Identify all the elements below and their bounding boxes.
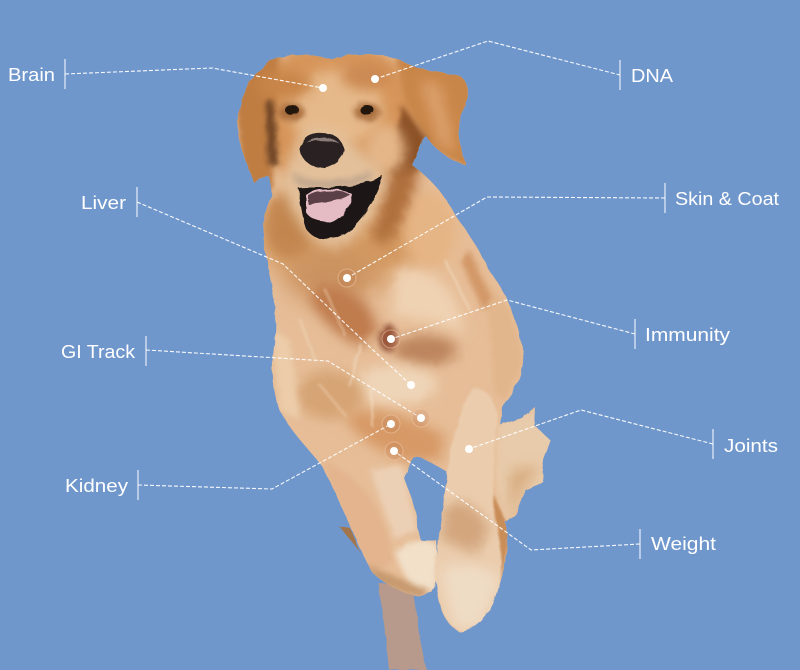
rear thigh edge [494, 495, 510, 590]
far paw tip [339, 526, 360, 552]
label: DNA: DNA [631, 66, 673, 86]
tail feathers [494, 409, 550, 521]
belly [345, 410, 445, 462]
label: Immunity: Immunity [645, 325, 730, 345]
marker dots [319, 75, 473, 455]
left foreleg [324, 467, 390, 570]
marker rings [338, 269, 430, 460]
label: Skin & Coat: Skin & Coat [675, 189, 779, 209]
connector lines [65, 41, 713, 550]
foreleg [436, 388, 502, 631]
base coat [230, 45, 560, 645]
tongue [306, 189, 352, 222]
chest lower light [353, 365, 437, 405]
left leg inner [370, 465, 417, 540]
rear side [488, 295, 524, 396]
left ear [237, 57, 284, 192]
left flank light [272, 330, 300, 420]
cheek right [365, 124, 405, 176]
nose [300, 133, 344, 168]
lip shade [292, 170, 372, 189]
rear shade [460, 250, 492, 310]
nose highlight [306, 137, 340, 144]
eye shadow right [354, 103, 380, 121]
chest dark fur [310, 285, 378, 345]
dog body [230, 40, 560, 645]
eye left [285, 105, 299, 115]
fore chest [296, 371, 364, 419]
paw shade [369, 566, 430, 596]
rear leg [378, 583, 426, 670]
ruff right [404, 192, 456, 268]
neck dark left [266, 191, 314, 259]
forehead light [287, 70, 383, 146]
chest hollow [379, 324, 397, 352]
neck orange [263, 192, 422, 293]
paw light [440, 565, 500, 628]
label: Brain: Brain [8, 65, 55, 85]
foreleg shade [440, 502, 490, 555]
shoulder shade [393, 335, 457, 365]
tail shade [508, 465, 540, 520]
label: Weight: Weight [651, 534, 716, 554]
label ticks [65, 59, 713, 559]
right ear [394, 58, 468, 166]
left paw [395, 540, 438, 596]
eye right [360, 105, 374, 115]
left ear shade [266, 100, 278, 165]
fur streaks [300, 260, 470, 425]
ear highlight [420, 80, 455, 150]
neck left [286, 247, 374, 303]
label: GI Track: GI Track [61, 342, 136, 362]
mouth [298, 176, 383, 239]
breast light [392, 268, 465, 335]
muzzle [282, 127, 388, 248]
head colour [272, 54, 418, 178]
dog illustration [230, 40, 560, 670]
label: Liver: Liver [81, 193, 126, 213]
label: Joints: Joints [724, 436, 778, 456]
eye shadow left [278, 103, 304, 121]
brow shade right [341, 62, 389, 90]
ear underside shadow [390, 105, 428, 190]
tongue shadow [308, 190, 350, 204]
brow shade left [257, 71, 313, 99]
neck dark right [372, 165, 420, 245]
label: Kidney: Kidney [65, 476, 128, 496]
